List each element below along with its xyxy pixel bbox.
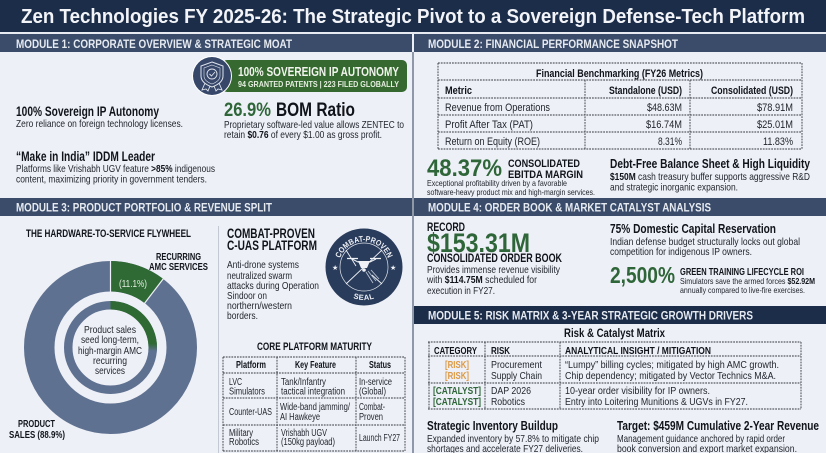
label: recurring AMC services: RECURRING (156, 251, 201, 263)
text block: combat-proven C-UAS: attacks during Operation (227, 280, 319, 292)
stat: record order book: execution in FY27. (427, 285, 495, 297)
donut chart: revenue split: (11.1%) (119, 278, 147, 290)
module 4 heading (414, 198, 826, 216)
table: financial benchmarking: $25.01M (757, 119, 793, 131)
text block: sovereign IP (16, 104, 183, 130)
stat: EBITDA margin: EBITDA MARGIN (508, 169, 583, 181)
table: core platform maturity: (Global) (359, 386, 386, 398)
donut chart: revenue split: services (95, 365, 125, 377)
table: financial benchmarking: Metric (445, 85, 472, 97)
label: product sales: SALES (88.9%) (9, 429, 65, 441)
table: risk and catalyst matrix: ANALYTICAL INSIGHT / MITIGATION (565, 345, 711, 357)
text block: domestic capital reservation (610, 221, 800, 258)
donut chart: revenue split: Product sales (84, 324, 136, 336)
text block: combat-proven C-UAS (227, 226, 319, 322)
table: core platform maturity: Vrishabh UGV (281, 428, 327, 439)
table: risk and catalyst matrix: “Lumpy” billing cycles; mitigated by high AMC growth. (565, 359, 779, 371)
text block: sovereign IP: 100% Sovereign IP Autonomy (16, 104, 159, 119)
module 2 heading (414, 34, 826, 52)
module 1 heading (0, 34, 412, 52)
text block: combat-proven C-UAS: COMBAT-PROVEN (227, 226, 315, 241)
table: core platform maturity: Simulators (229, 386, 265, 398)
stat: EBITDA margin: Exceptional profitability driven by a favorable (427, 178, 567, 188)
stat: green training ROI: 2,500% (610, 262, 675, 288)
table: risk and catalyst matrix: 10-year order visibility for IP owners. (565, 385, 710, 397)
table: risk and catalyst matrix: Supply Chain (491, 370, 542, 382)
table: financial benchmarking: $48.63M (647, 102, 682, 114)
stat: record order book: RECORD (427, 220, 465, 234)
stat: record order book: Provides immense revenue visibility (427, 264, 561, 276)
text block: combat-proven C-UAS: borders. (227, 310, 258, 322)
table: core platform maturity: Combat- (359, 402, 385, 413)
module 4 heading: MODULE 4: ORDER BOOK & MARKET CATALYST ANALYSIS (428, 200, 711, 214)
text block: revenue target (617, 419, 819, 453)
table: financial benchmarking: Profit After Tax (PAT) (445, 119, 533, 131)
table: risk and catalyst matrix: Entry into Loitering Munitions & UGVs in FY27. (565, 396, 748, 408)
table: core platform maturity: AI Hawkeye (280, 412, 320, 423)
table: financial benchmarking: $78.91M (757, 102, 793, 114)
table: financial benchmarking: Consolidated (USD) (711, 85, 793, 97)
module 1 heading: MODULE 1: CORPORATE OVERVIEW & STRATEGIC MOAT (16, 37, 293, 51)
label: recurring AMC services (149, 251, 208, 273)
stat: green training ROI: Simulators save the armed forces $52.92M (680, 277, 815, 286)
text block: domestic capital reservation: competition for indigenous IP owners. (610, 246, 752, 258)
table: risk and catalyst matrix: [CATALYST] (433, 385, 481, 397)
stat: BOM ratio: BOM Ratio (276, 100, 355, 121)
text block: strategic inventory buildup: Expanded inventory by 57.8% to mitigate chip (427, 433, 599, 445)
text block: combat-proven C-UAS: Sindoor on (227, 290, 267, 302)
text block: strategic inventory buildup: Strategic Inventory Buildup (427, 419, 558, 433)
text block: combat-proven C-UAS: neutralized swarm (227, 270, 292, 282)
text block: sovereign IP: Zero reliance on foreign technology licenses. (16, 118, 183, 130)
stat: green training ROI: annually compared to live-fire exercises. (680, 286, 805, 295)
table: financial benchmarking: $16.74M (646, 119, 682, 131)
module 3 heading (0, 198, 412, 216)
table: financial benchmarking: 8.31% (658, 136, 682, 148)
icon: combat-proven seal (326, 228, 402, 306)
table: financial benchmarking: Financial Benchmarking (FY26 Metrics) (536, 68, 703, 80)
text block: combat-proven C-UAS: C-UAS PLATFORM (227, 238, 317, 253)
donut chart: revenue split: high-margin AMC (78, 345, 142, 357)
text block: debt-free balance sheet (610, 156, 811, 194)
table: core platform maturity: Status (369, 359, 391, 371)
table: risk and catalyst matrix (428, 328, 801, 409)
label: product sales: PRODUCT (18, 418, 55, 430)
text block: combat-proven C-UAS: Anti-drone systems (227, 259, 299, 271)
badge: sovereign IP autonomy (192, 56, 407, 96)
table: core platform maturity (223, 341, 405, 451)
panel: module 2 financial performance (414, 34, 826, 197)
stat: EBITDA margin: CONSOLIDATED (508, 158, 580, 170)
text block: debt-free balance sheet: and strategic inorganic expansion. (610, 182, 738, 194)
stat: BOM ratio: retain $0.76 of every $1.00 as gross profit. (224, 129, 382, 141)
table: financial benchmarking (438, 63, 802, 149)
icon: combat-proven seal: ★ (390, 264, 396, 272)
table: core platform maturity: Launch FY27 (359, 433, 400, 444)
table: risk and catalyst matrix: [RISK] (445, 359, 469, 371)
stat: EBITDA margin: software-heavy product mix and high-margin services. (427, 187, 595, 197)
donut chart: revenue split: seed long-term, (81, 334, 139, 346)
table: financial benchmarking: Standalone (USD) (609, 85, 682, 97)
table: risk and catalyst matrix: Risk & Catalyst Matrix (564, 328, 666, 340)
table: core platform maturity: (150kg payload) (281, 437, 335, 448)
icon: combat-proven seal: ★ (332, 264, 338, 272)
stat: EBITDA margin (427, 155, 595, 197)
text block: make in india (16, 149, 215, 186)
badge: sovereign IP autonomy: 100% SOVEREIGN IP AUTONOMY (238, 64, 399, 79)
donut chart: revenue split (39, 260, 182, 419)
table: financial benchmarking: Revenue from Operations (445, 102, 550, 114)
title banner (0, 0, 826, 34)
table: core platform maturity: Wide-band jamming/ (280, 402, 350, 413)
stat: BOM ratio: Proprietary software-led value allows ZENTEC to (224, 119, 404, 131)
table: risk and catalyst matrix: Robotics (491, 396, 525, 408)
table: risk and catalyst matrix: RISK (491, 345, 510, 357)
donut chart: revenue split: recurring (93, 355, 127, 367)
table: core platform maturity: tactical integration (281, 386, 345, 398)
badge: sovereign IP autonomy: 94 GRANTED PATENTS | 223 FILED GLOBALLY (238, 79, 399, 89)
stat: record order book: $153.31M (427, 228, 530, 258)
table: risk and catalyst matrix: Procurement (491, 359, 542, 371)
table: risk and catalyst matrix: Chip dependency; mitigated by Vector Technics M&A. (565, 370, 776, 382)
table: risk and catalyst matrix: [RISK] (445, 370, 469, 382)
label: recurring AMC services: AMC SERVICES (149, 261, 208, 273)
stat: BOM ratio (224, 100, 404, 141)
table: financial benchmarking: 11.83% (763, 136, 793, 148)
panel: module 1 corporate overview (0, 34, 412, 186)
text block: domestic capital reservation: 75% Domestic Capital Reservation (610, 221, 776, 236)
label: product sales (9, 418, 65, 441)
module 3 heading: MODULE 3: PRODUCT PORTFOLIO & REVENUE SPLIT (16, 200, 273, 214)
table: risk and catalyst matrix: CATEGORY (434, 345, 477, 357)
panel: module 3 product portfolio (0, 198, 412, 453)
table: core platform maturity: In-service (359, 377, 392, 388)
table: core platform maturity: Counter-UAS (229, 407, 272, 418)
module 5 heading: MODULE 5: RISK MATRIX & 3-YEAR STRATEGIC GROWTH DRIVERS (428, 308, 753, 322)
table: risk and catalyst matrix: DAP 2026 (491, 385, 531, 397)
table: core platform maturity: Key Feature (295, 359, 336, 371)
text block: make in india: Platforms like Vrishabh UGV feature >85% indigenous (16, 163, 215, 175)
table: core platform maturity: Military (229, 428, 253, 439)
stat: BOM ratio: 26.9% (224, 100, 271, 121)
icon: combat-proven seal: SEAL (354, 294, 374, 300)
table: core platform maturity: Proven (359, 412, 383, 423)
panel: module 4 order book (414, 198, 826, 297)
stat: record order book: CONSOLIDATED ORDER BOOK (427, 251, 562, 265)
panel: module 5 risk matrix (414, 306, 826, 453)
table: risk and catalyst matrix: [CATALYST] (433, 396, 481, 408)
table: core platform maturity: Platform (236, 359, 266, 371)
text block: make in india: “Make in India” IDDM Leader (16, 149, 156, 164)
icon: combat-proven seal: COMBAT-PROVEN (336, 236, 393, 258)
table: core platform maturity: CORE PLATFORM MATURITY (257, 341, 372, 353)
flywheel heading: THE HARDWARE-TO-SERVICE FLYWHEEL (26, 228, 191, 240)
table: core platform maturity: Robotics (229, 437, 259, 448)
table: financial benchmarking: Return on Equity (ROE) (445, 136, 540, 148)
text block: strategic inventory buildup (427, 419, 599, 453)
text block: combat-proven C-UAS: northern/western (227, 300, 292, 312)
module 2 heading: MODULE 2: FINANCIAL PERFORMANCE SNAPSHOT (428, 37, 679, 51)
text block: make in india: content, maximizing priority in government tenders. (16, 174, 207, 186)
stat: record order book: with $114.75M scheduled for (426, 274, 537, 286)
stat: green training ROI (610, 262, 815, 295)
table: core platform maturity: LVC (229, 377, 242, 388)
stat: record order book (426, 220, 562, 297)
table: core platform maturity: Tank/Infantry (281, 377, 326, 388)
stat: EBITDA margin: 48.37% (427, 155, 502, 182)
